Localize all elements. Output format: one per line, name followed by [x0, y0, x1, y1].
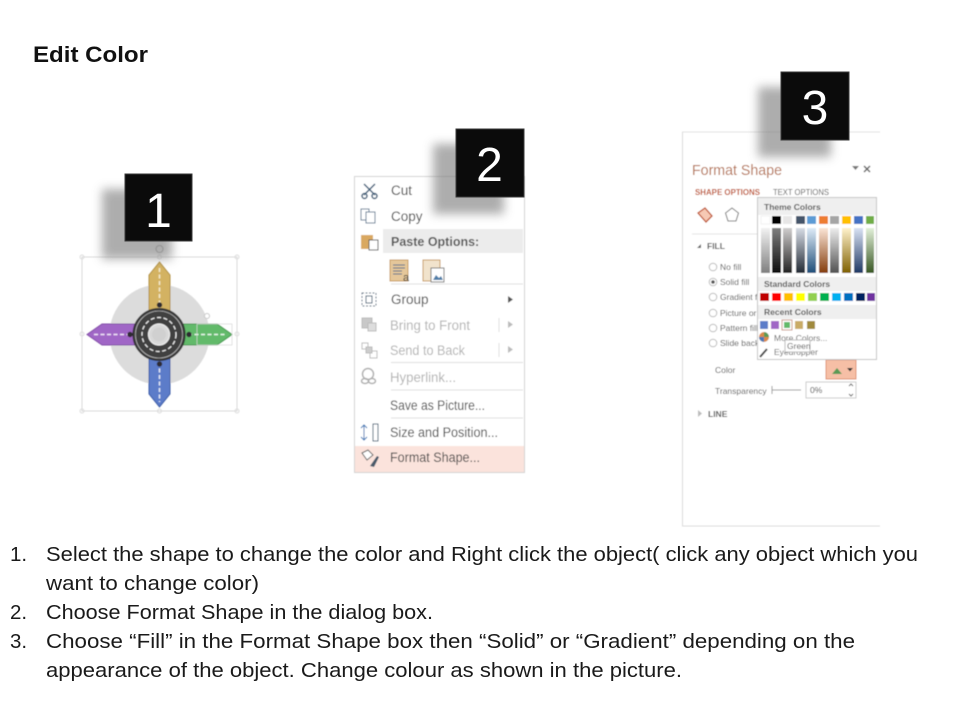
icon: pentagon [726, 208, 738, 221]
theme colours top row [761, 216, 874, 224]
fill options: Pattern fill [720, 323, 758, 333]
panel: format shape [682, 132, 880, 526]
badge 2 [433, 129, 524, 214]
instructions list: Choose Format Shape in the dialog box. [46, 601, 433, 624]
menu labels [390, 183, 498, 465]
instructions list [10, 543, 918, 682]
panel: format shape: Format Shape [692, 163, 782, 179]
panel: format shape: LINE [708, 409, 728, 419]
arrow: green right [182, 314, 232, 345]
tooltip: Green: Green [787, 341, 811, 351]
submenu arrows [508, 296, 513, 353]
arrow: gold up [149, 262, 170, 312]
format shape highlight [355, 446, 524, 472]
gray background circle [110, 284, 210, 384]
theme colours shades [761, 228, 874, 273]
paste options header [383, 229, 523, 253]
fill options: Transparency [715, 386, 767, 396]
badge 3: 3 [802, 82, 828, 135]
fill options: Slide back [720, 338, 760, 348]
color button [826, 360, 856, 379]
transparency control: 0% [810, 385, 823, 395]
menu labels: Group [391, 292, 429, 307]
title: Edit Color [33, 42, 148, 67]
figure: selected shape diagram [80, 246, 239, 413]
colour popup: Eyedropper [774, 347, 818, 357]
instructions list: appearance of the object. Change colour as shown in the picture. [46, 659, 682, 682]
arrow: purple left [87, 324, 137, 345]
icon: paste picture [423, 260, 444, 282]
fill options [709, 262, 767, 396]
icon: fill bucket [698, 208, 712, 222]
menu labels: Copy [391, 209, 423, 224]
menu labels: Size and Position... [390, 425, 498, 440]
icon: bring to front [362, 318, 376, 331]
icon: group [362, 293, 376, 306]
panel: format shape: TEXT OPTIONS [773, 187, 829, 197]
instructions list: 3. [10, 630, 27, 653]
colour popup: Standard Colors [764, 279, 830, 289]
colour popup: More Colors... [774, 333, 827, 343]
menu labels: Cut [391, 183, 412, 198]
menu labels: Bring to Front [390, 318, 470, 333]
recent colours [760, 320, 815, 330]
icon: paste [361, 235, 378, 250]
selection frame [80, 246, 239, 413]
colour popup: Theme Colors [764, 202, 821, 212]
instructions list: 2. [10, 601, 27, 624]
panel: format shape: SHAPE OPTIONS [695, 187, 760, 197]
menu labels: Send to Back [390, 343, 465, 358]
badge 1: 1 [145, 185, 172, 238]
icon: paste text [390, 260, 410, 284]
instructions list: Choose “Fill” in the Format Shape box then “Solid” or “Gradient” depending on the [46, 630, 855, 653]
roundabout [133, 308, 185, 360]
fill options: No fill [720, 262, 741, 272]
panel: context menu [354, 176, 524, 472]
instructions list: 1. [10, 543, 27, 566]
instructions list: Select the shape to change the color and Right click the object( click any object which you [46, 543, 918, 566]
icon: paste text: a [403, 272, 410, 284]
fill options: Gradient f [720, 292, 758, 302]
standard colours [760, 293, 875, 301]
connector dots [127, 302, 192, 367]
icon: hyperlink [362, 368, 376, 384]
badge 1 [102, 174, 192, 259]
colour popup [758, 198, 876, 360]
icon: copy [361, 209, 375, 223]
badge 3 [758, 72, 849, 157]
icon: format shape [362, 450, 379, 467]
icon: size and position [361, 424, 378, 441]
menu labels: Hyperlink... [390, 370, 456, 385]
fill options: Picture or [720, 308, 757, 318]
panel: format shape: FILL [707, 241, 725, 251]
instructions list: want to change color) [45, 572, 259, 595]
badge 2: 2 [476, 139, 503, 192]
arrow: blue down [149, 358, 170, 407]
icon: send to back [362, 343, 377, 358]
colour popup: Recent Colors [764, 307, 822, 317]
transparency control [772, 382, 856, 398]
menu labels: Save as Picture... [390, 398, 485, 413]
menu labels: Paste Options: [391, 235, 479, 249]
icon: scissors [362, 184, 377, 198]
fill options: Solid fill [720, 277, 749, 287]
menu labels: Format Shape... [390, 450, 480, 465]
fill options: Color [715, 365, 735, 375]
separators [391, 284, 523, 418]
